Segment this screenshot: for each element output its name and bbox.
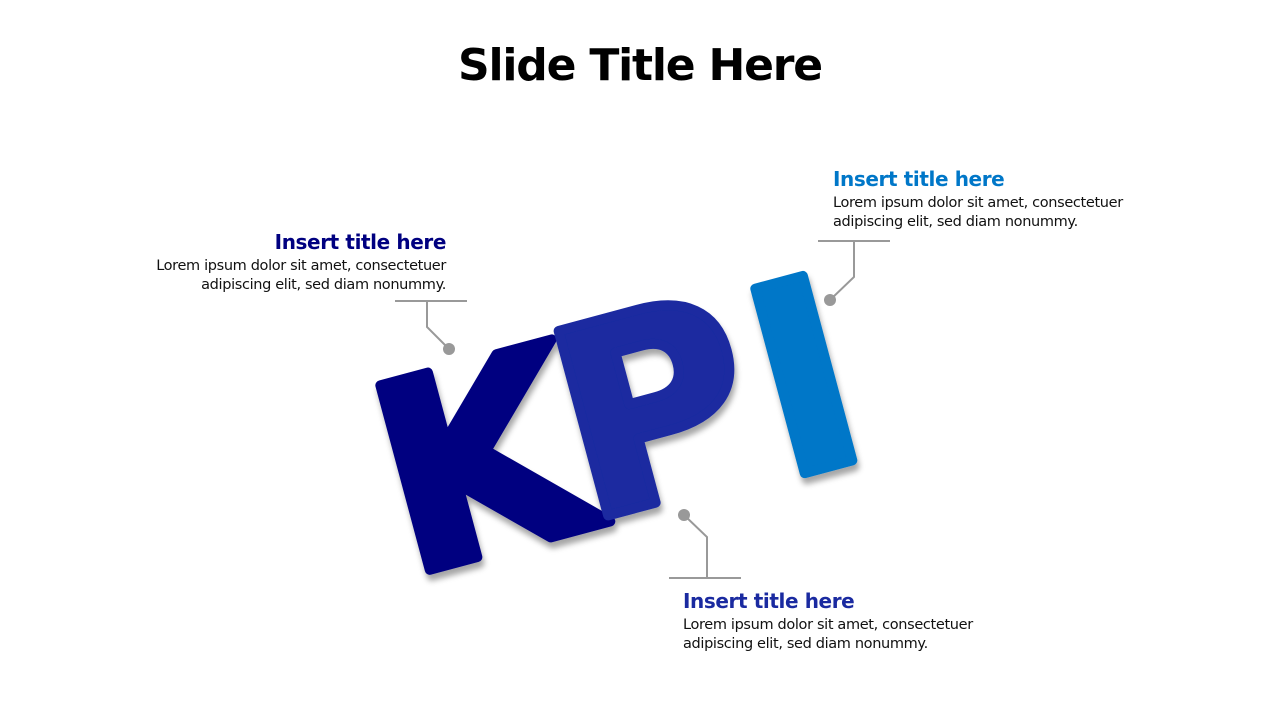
callout left: Insert title here (275, 230, 446, 254)
connector bottom (669, 509, 741, 578)
callout left (156, 230, 446, 293)
callout bottom: adipiscing elit, sed diam nonummy. (683, 636, 928, 652)
callout right: adipiscing elit, sed diam nonummy. (833, 214, 1078, 230)
letter K: K (344, 286, 628, 636)
letter I: I (719, 219, 892, 539)
callout bottom: Lorem ipsum dolor sit amet, consectetuer (683, 617, 973, 633)
callout bottom: Insert title here (683, 589, 854, 613)
callout right (833, 167, 1124, 230)
connector right (818, 241, 890, 306)
connector left (395, 301, 467, 355)
callout right: Insert title here (833, 167, 1004, 191)
callout left: Lorem ipsum dolor sit amet, consectetuer (156, 258, 446, 274)
callout bottom (683, 589, 974, 652)
title: Slide Title Here (458, 40, 822, 91)
callout left: adipiscing elit, sed diam nonummy. (201, 277, 446, 293)
letter P: P (522, 237, 786, 582)
callout right: Lorem ipsum dolor sit amet, consectetuer (833, 195, 1123, 211)
